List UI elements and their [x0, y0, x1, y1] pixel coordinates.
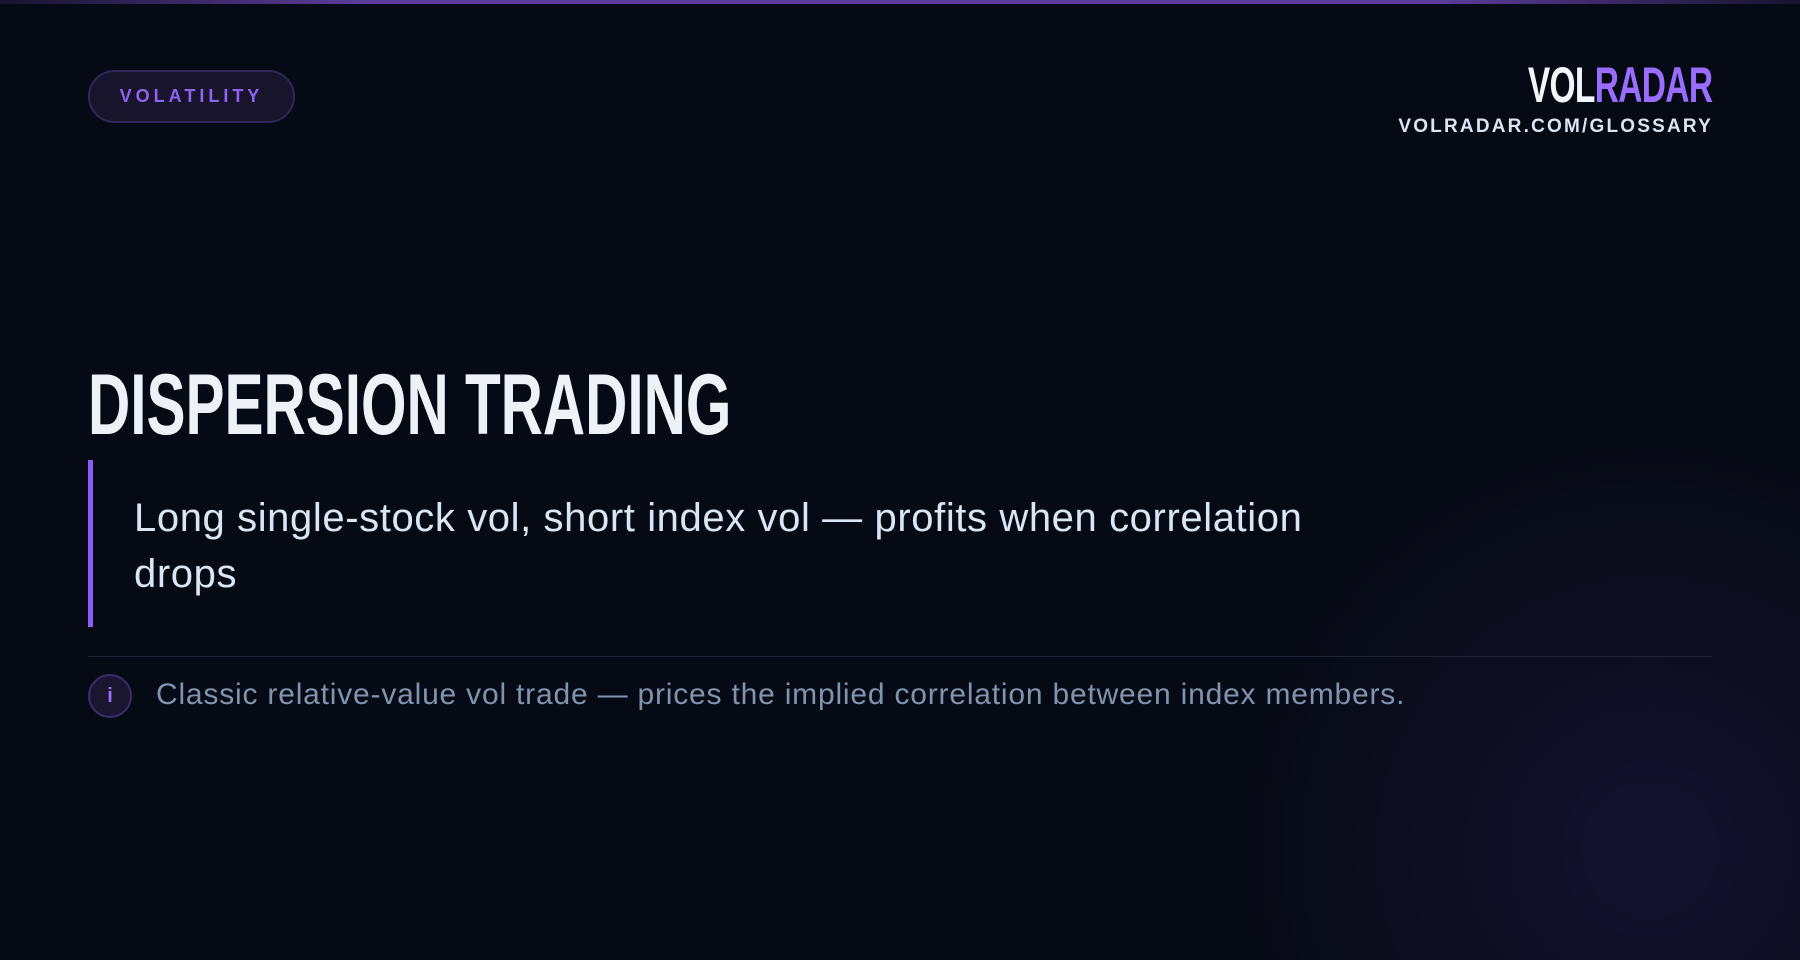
quote: definition: Long single-stock vol, short index vol — profits when correlation drops: [134, 496, 1302, 596]
icon: info: i: [107, 685, 113, 707]
title: DISPERSION TRADING: [88, 357, 731, 453]
note text: Classic relative-value vol trade — prices the implied correlation between index members.: [156, 678, 1405, 711]
url: VOLRADAR.COM/GLOSSARY: [1398, 116, 1713, 137]
logo: VOLRADAR: [1528, 57, 1712, 113]
badge: volatility: VOLATILITY: [120, 86, 263, 106]
quote: definition: [88, 460, 1388, 627]
icon: info: [88, 674, 132, 718]
badge: volatility: [88, 70, 295, 123]
